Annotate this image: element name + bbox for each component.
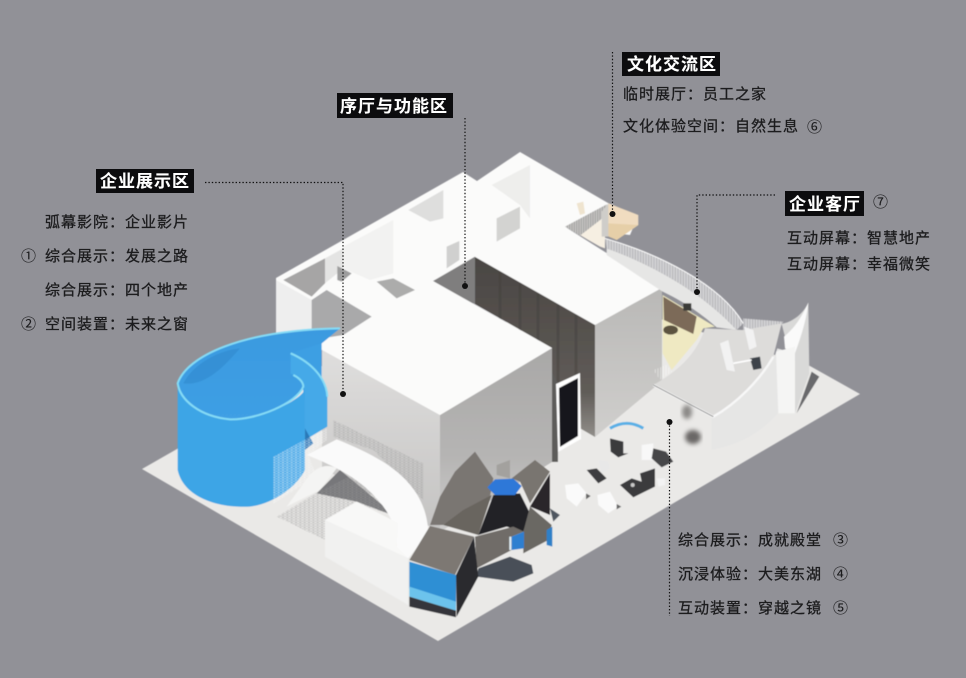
lounge furniture <box>565 423 673 513</box>
blue spiral cinema <box>178 328 340 507</box>
dark central wall <box>475 257 595 437</box>
heading: culture exchange area: 文化交流区 <box>627 54 717 74</box>
heading: corporate lounge <box>785 191 888 216</box>
text: item 5: 互动装置：穿越之镜 <box>678 599 822 617</box>
heading: corporate exhibit area: 企业展示区 <box>100 171 190 191</box>
text: item 3: ③ <box>833 532 848 549</box>
right cube <box>595 288 662 437</box>
building illustration <box>142 152 860 641</box>
entrance mesh, canopy and white box <box>273 420 428 605</box>
faceted dark pavilion <box>409 452 560 617</box>
text: item 3: 综合展示：成就殿堂 <box>678 532 822 549</box>
leader line: corporate exhibit <box>205 182 346 397</box>
panel: corporate exhibit area <box>21 169 194 333</box>
text: item 5: ⑤ <box>833 600 848 617</box>
leader line: foyer <box>462 118 468 289</box>
text: item 6: ⑥ <box>807 119 822 136</box>
back wing rooms <box>276 152 662 415</box>
leader line: culture exchange <box>610 52 616 217</box>
text: item 4: 沉浸体验：大美东湖 <box>678 566 822 583</box>
text: four estates: 综合展示：四个地产 <box>45 282 189 299</box>
heading: corporate lounge: 企业客厅 <box>789 194 861 214</box>
leader line: corporate lounge <box>694 195 775 295</box>
text: item 6: 文化体验空间：自然生息 <box>623 118 799 135</box>
text: cinema: 弧幕影院：企业影片 <box>45 213 189 231</box>
curved terrace lounge <box>605 238 819 450</box>
wooden cultural room <box>565 202 638 248</box>
text: happy smile: 互动屏幕：幸福微笑 <box>787 256 931 273</box>
text: item 2: 空间装置：未来之窗 <box>45 315 189 333</box>
text: smart estate: 互动屏幕：智慧地产 <box>787 229 931 247</box>
heading: foyer and function area: 序厅与功能区 <box>340 96 448 116</box>
text: temporary hall: 临时展厅：员工之家 <box>623 86 767 103</box>
heading: corporate lounge: ⑦ <box>873 194 888 211</box>
text: item 4: ④ <box>833 566 848 583</box>
blurred screen figures <box>682 405 701 444</box>
leader line: lower exhibits <box>666 419 672 616</box>
panel: corporate lounge <box>785 191 931 273</box>
main cube <box>322 281 552 532</box>
base slab <box>142 300 860 641</box>
panel: lower exhibits <box>678 532 848 617</box>
text: item 1: ① <box>21 248 36 265</box>
panel: culture exchange area <box>622 52 822 136</box>
text: item 1: 综合展示：发展之路 <box>45 248 189 265</box>
mirror doorway <box>552 372 581 462</box>
text: item 2: ② <box>21 316 36 333</box>
